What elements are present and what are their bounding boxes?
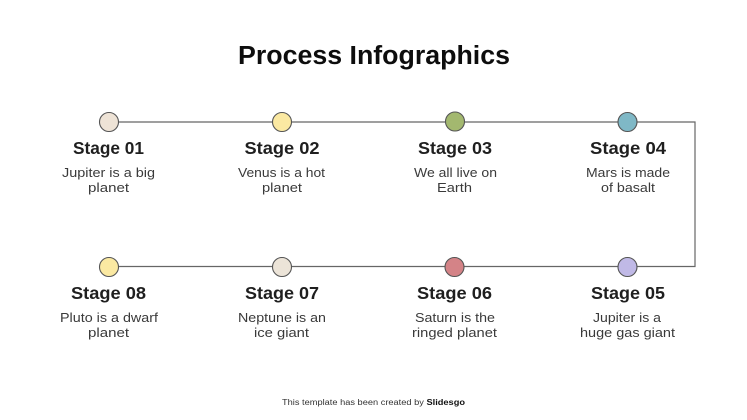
stage 05 text: Jupiter is a (593, 310, 662, 325)
stage 02 (238, 112, 325, 195)
stage 03 text: Earth (437, 180, 472, 195)
stage 07 heading: Stage 07 (245, 283, 319, 303)
stage 06 heading: Stage 06 (417, 283, 492, 303)
icon: stage 01 node (100, 112, 118, 132)
stage 03 (414, 112, 497, 195)
stage 04 text (586, 165, 670, 195)
icon: stage 06 node (445, 258, 464, 276)
stage 02 heading: Stage 02 (244, 138, 320, 158)
stage 06 text: Saturn is the (415, 310, 495, 325)
stage 04 (586, 112, 670, 195)
stage 05 text (580, 310, 675, 340)
stage 05 text: huge gas giant (580, 325, 675, 340)
stage 04 heading: Stage 04 (590, 138, 666, 158)
stage 02 text: planet (262, 180, 302, 195)
icon: stage 08 node (100, 258, 118, 276)
stage 07 text: ice giant (254, 325, 309, 340)
stage 01 heading: Stage 01 (73, 138, 144, 158)
icon: stage 07 node (272, 258, 292, 276)
stage 03 heading: Stage 03 (418, 138, 492, 158)
stage 02 text (238, 165, 325, 195)
stage 08 text: Pluto is a dwarf (60, 310, 158, 325)
icon: stage 04 node (618, 112, 637, 132)
stage 05 (580, 258, 675, 340)
stage 03 text (414, 165, 497, 195)
icon: stage 03 node (446, 112, 464, 131)
stage 05 heading: Stage 05 (591, 283, 665, 303)
stage 08 (60, 258, 158, 340)
icon: stage 05 node (618, 258, 637, 276)
stage 01 text: planet (88, 180, 129, 195)
stage 07 text (238, 310, 326, 340)
stage 06 text (412, 310, 497, 340)
stage 08 heading: Stage 08 (71, 283, 146, 303)
stage 07 text: Neptune is an (238, 310, 326, 325)
stage 07 (238, 258, 326, 340)
stage 01 (62, 112, 155, 195)
stage 08 text (60, 310, 158, 340)
footer credit: This template has been created by Slidesgo (282, 398, 465, 407)
stage 04 text: Mars is made (586, 165, 670, 180)
stage 02 text: Venus is a hot (238, 165, 325, 180)
stage 04 text: of basalt (601, 180, 655, 195)
stage 08 text: planet (88, 325, 129, 340)
stage 06 text: ringed planet (412, 325, 497, 340)
stage 06 (412, 258, 497, 340)
connector line (109, 122, 695, 266)
title: Process Infographics (238, 42, 510, 70)
stage 03 text: We all live on (414, 165, 497, 180)
stage 01 text: Jupiter is a big (62, 165, 155, 180)
stage 01 text (62, 165, 155, 195)
icon: stage 02 node (272, 112, 292, 132)
